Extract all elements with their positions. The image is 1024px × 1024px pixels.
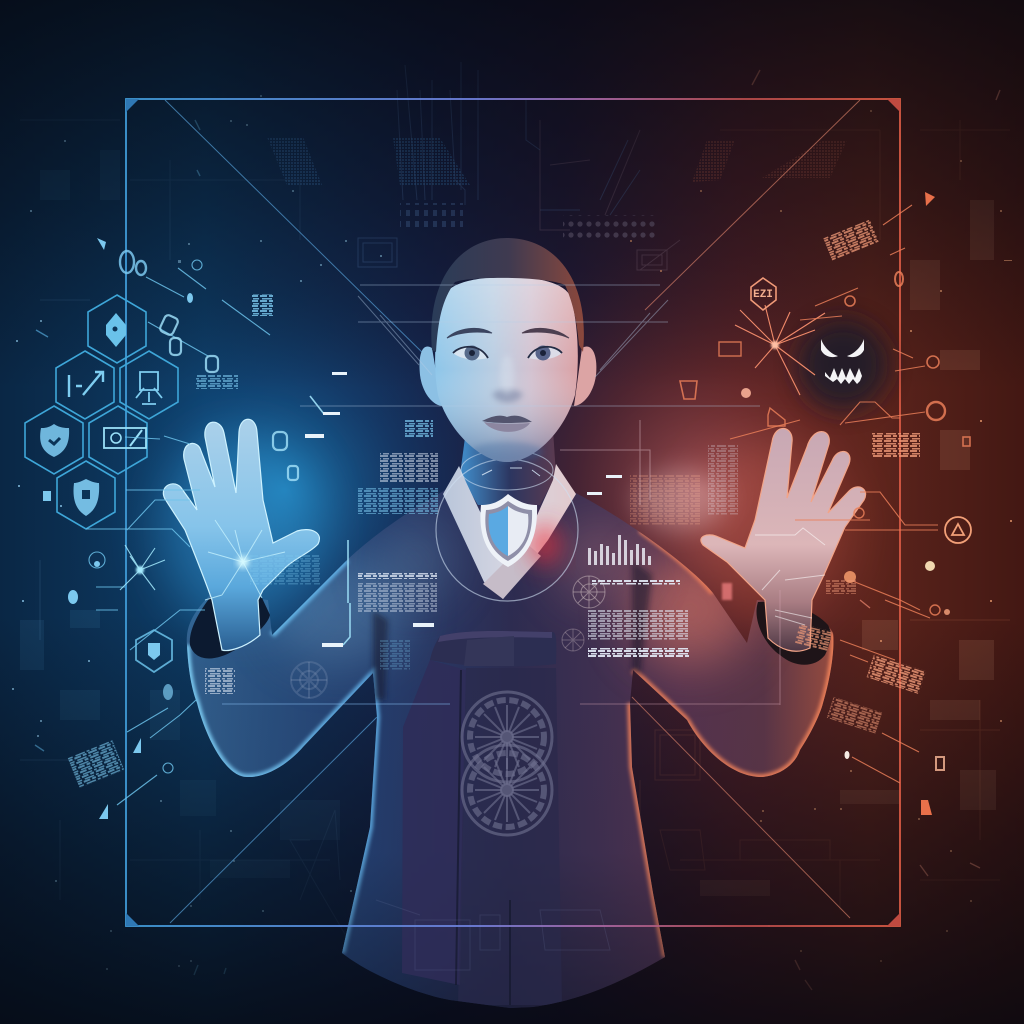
- monster teeth: [825, 368, 862, 384]
- right hand: [690, 428, 866, 665]
- mouth: [482, 416, 532, 432]
- emblem lower: [462, 745, 552, 835]
- monster face: [798, 320, 888, 410]
- frame corner left bottom: [126, 913, 139, 926]
- left hand: [160, 419, 320, 658]
- bar chart hologram: [588, 535, 651, 565]
- hexagon: lock shield: [57, 461, 115, 529]
- hair: [431, 238, 584, 352]
- palm crack glow: [205, 520, 285, 600]
- right crack: [735, 305, 825, 395]
- right small icons: [845, 296, 855, 306]
- chest light right: [555, 520, 645, 600]
- hexagon: power panel: [89, 406, 147, 474]
- diagonal light beams right: [632, 100, 860, 918]
- face: [435, 277, 578, 462]
- coat seams: [456, 670, 510, 1005]
- monster eye left: [821, 339, 838, 357]
- diagonal light beams left: [165, 100, 430, 923]
- coat center panel: [458, 668, 562, 1005]
- left eyebrow: [447, 328, 492, 338]
- left text blocks: [68, 294, 320, 788]
- hexagon: shield: [25, 406, 83, 474]
- sleeve opening: [190, 592, 270, 658]
- left crack: [120, 545, 165, 590]
- small emblem lower chest: [562, 629, 584, 651]
- left circuits and small icons: [43, 238, 298, 819]
- right hexagon label: EZI: [753, 289, 773, 301]
- frame corner right bottom: [887, 913, 900, 926]
- armpit folds: [373, 560, 652, 700]
- neck: [460, 430, 556, 505]
- left ear: [420, 347, 442, 406]
- right ear: [574, 347, 596, 406]
- left hexagon cluster: [25, 295, 178, 529]
- right circuits and small icons: [680, 192, 971, 815]
- small filled shapes: [43, 238, 193, 819]
- hexagon: monitor: [120, 351, 178, 419]
- white dash marks: [305, 372, 622, 647]
- coat bottom shade: [190, 656, 832, 1008]
- rim strokes: [187, 530, 833, 957]
- nose: [492, 355, 523, 402]
- chin shadow: [471, 442, 543, 462]
- hexagon: gear: [88, 295, 146, 363]
- body coat: [186, 490, 834, 1008]
- chest light left: [375, 520, 455, 600]
- coat left panel: [402, 660, 466, 985]
- bow knot: [430, 631, 556, 667]
- right threat glow: [635, 470, 725, 530]
- scan lines and diamond visor: [300, 285, 760, 406]
- shield emblem: [480, 494, 537, 567]
- frame corner right top: [887, 99, 900, 112]
- right eye: [528, 346, 562, 360]
- right text blocks: [795, 220, 926, 733]
- right hexagon label: [751, 278, 776, 310]
- frame line over right arm: [580, 590, 780, 705]
- collar: [443, 464, 576, 599]
- coat silhouette: [187, 490, 833, 1008]
- right eyebrow: [522, 328, 569, 338]
- palm and fingers: [163, 419, 319, 650]
- left eye: [453, 346, 488, 360]
- hem circuitry: [376, 900, 610, 970]
- interface frame: [126, 99, 900, 926]
- coat lighting and rim: [187, 506, 834, 1008]
- palm and fingers: [701, 428, 866, 651]
- frame line over arm: [222, 703, 450, 705]
- frame corner left top: [126, 99, 139, 112]
- holographic ring: [436, 450, 578, 601]
- chain icons: [159, 314, 298, 480]
- emblem upper: [462, 692, 552, 782]
- data block left of torso: [310, 396, 438, 670]
- hand glow: [160, 435, 320, 625]
- link icon top: [120, 251, 146, 275]
- red threat glow on chest: [531, 525, 559, 565]
- upper arm light right: [630, 555, 750, 665]
- monster eye right: [847, 339, 864, 357]
- sleeve opening: [757, 602, 831, 665]
- head: [420, 238, 596, 462]
- upper arm light left: [270, 555, 410, 665]
- data block right of torso: [560, 420, 738, 658]
- palm circuits: [755, 528, 825, 625]
- small emblem left arm: [291, 662, 327, 698]
- left shield badge: [136, 630, 172, 672]
- face shading: [435, 277, 578, 462]
- hand glow: [690, 440, 850, 620]
- small emblem right chest: [573, 576, 605, 608]
- hexagon: arrow: [56, 351, 114, 419]
- right triangle button: [945, 517, 971, 543]
